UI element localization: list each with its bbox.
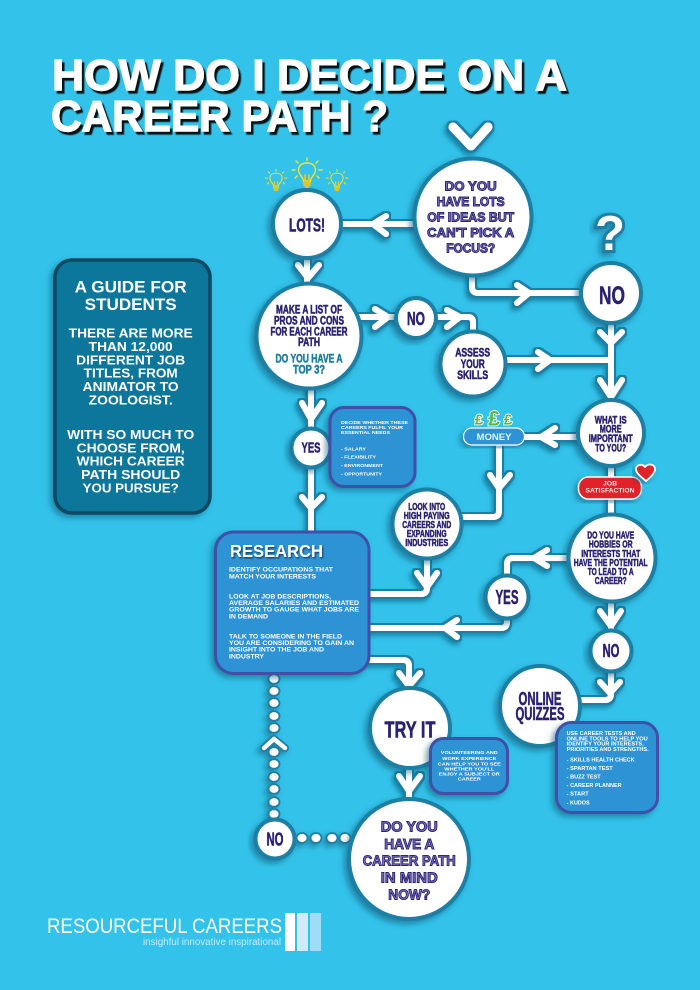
panel: essential needs: - FLEXIBILITY [341,455,377,461]
node: assess skills: SKILLS [457,368,488,382]
node: no (bottom) [256,820,294,858]
node: assess skills: ASSESS [455,346,490,360]
panel: guide for students: A GUIDE FOR [75,279,187,297]
node: ideas question: FOCUS? [446,240,495,255]
node: career path in mind: HAVE A [384,837,435,853]
node: pros and cons list: FOR EACH CAREER [270,326,348,338]
icon: pound signs: £ [504,412,513,428]
node: hobbies question: DO YOU HAVE [587,529,634,541]
node: pros and cons list: MAKE A LIST OF [276,304,342,316]
panel: guide for students: TITLES, FROM [84,366,178,381]
node: pros and cons list: TOP 3? [293,364,325,376]
arrow: yes to research [302,466,322,532]
arrow: no to assess [435,310,473,334]
node: career path in mind: IN MIND [381,871,438,887]
node: pros and cons list [256,284,362,388]
node: pros and cons list: PATH [298,337,320,349]
arrow: no to what is more important [600,322,622,402]
node: yes (hobbies) [486,576,528,618]
label: job satisfaction [578,465,655,499]
node: ideas question: CAN'T PICK A [427,225,514,240]
dotted return path [264,674,350,843]
logo: resourceful careers: insighful innovative inspirational [143,936,281,948]
panel: guide for students: DIFFERENT JOB [76,352,185,367]
panel: volunteering [430,738,508,794]
node: what is more important: WHAT IS [595,414,627,426]
node: hobbies question: TO LEAD TO A [588,566,634,578]
panel: research: AVERAGE SALARIES AND ESTIMATED [229,600,359,607]
panel: guide for students: ANIMATOR TO [83,379,179,394]
panel: career tests: ONLINE TOOLS TO HELP YOU [567,736,648,742]
panel: guide for students [55,260,210,513]
icon: heart [636,465,655,481]
node: career path in mind: NOW? [388,887,430,903]
panel: research: GROWTH TO GAUGE WHAT JOBS ARE [229,607,360,614]
logo: resourceful careers: RESOURCEFUL CAREERS [47,914,282,938]
arrow: hobbies to no [600,600,621,632]
node: hobbies question: HAVE THE POTENTIAL [574,557,648,569]
arrow: lots to list [298,256,319,286]
node: no (top right) [581,263,641,323]
logo: resourceful careers [47,913,321,951]
node: hobbies question: CAREER? [595,575,627,587]
node: try it: TRY IT [384,717,436,743]
node: lots: LOTS! [289,216,325,236]
panel: career tests: - KUDOS [567,800,590,806]
node: what is more important: TO YOU? [595,442,626,454]
title [51,51,567,141]
node: career path in mind: CAREER PATH [363,854,456,870]
panel: essential needs: - OPPORTUNITY [341,471,383,477]
panel: research [216,532,369,674]
panel: essential needs: - ENVIRONMENT [341,463,383,469]
node: ideas question [414,158,532,276]
panel: research: LOOK AT JOB DESCRIPTIONS, [229,593,331,600]
node: yes (top 3) [292,428,330,468]
icon: pound signs: £ [475,412,484,428]
panel: career tests [556,722,658,812]
panel: volunteering: CAREER [458,777,481,783]
panel: guide for students: CHOOSE FROM, [77,440,185,455]
node: career path in mind: DO YOU [381,820,438,836]
node: no (hobbies) [590,630,632,672]
node: pros and cons list: DO YOU HAVE A [276,353,342,365]
arrow: list to no [358,309,398,327]
flow connectors [298,127,622,800]
node: look into high paying careers: CAREERS AND [402,519,451,531]
node: look into high paying careers: HIGH PAYING [404,510,450,522]
node: ideas question: DO YOU [445,179,497,194]
arrow: yes to research [368,615,507,637]
panel: research: IN DEMAND [229,613,268,620]
node: career path in mind [349,799,469,919]
node: look into high paying careers: EXPANDING [407,528,447,540]
arrow: ideas to no [472,272,582,303]
panel: volunteering: WHETHER YOU'LL [444,767,494,773]
node: no (list) [396,298,436,338]
node: ideas question: OF IDEAS BUT [427,210,514,225]
title: HOW DO I DECIDE ON A [52,51,567,100]
panel: guide for students: ZOOLOGIST. [89,392,173,407]
node: hobbies question: HOBBIES OR [589,539,633,551]
panel: essential needs [330,408,415,486]
arrow: list to yes [302,386,322,430]
panel: career tests: - CAREER PLANNER [567,783,622,789]
panel: volunteering: CAN HELP YOU TO SEE [438,761,502,767]
arrow: important to hobbies [608,464,614,516]
arrow: ideas to lots [340,216,415,234]
arrow: try it to career path [399,766,420,800]
label: job satisfaction: JOB [603,481,617,488]
node: yes (top 3): YES [302,440,320,457]
arrow: important to money [523,428,580,445]
node: pros and cons list: PROS AND CONS [274,315,344,327]
node: online quizzes: ONLINE [518,689,562,709]
arrow: high paying to research [368,556,437,594]
panel: essential needs: ESSENTIAL NEEDS [341,430,391,436]
panel: research: TALK TO SOMEONE IN THE FIELD [229,633,342,640]
panel: guide for students: WITH SO MUCH TO [67,427,194,442]
panel: career tests: IDENTIFY YOUR INTERESTS, [567,742,644,748]
panel: essential needs: - SALARY [341,446,367,452]
arrow: start chevron [453,127,488,146]
node: assess skills: YOUR [461,357,485,371]
node: no (hobbies): NO [602,641,620,661]
label: money: MONEY [476,432,512,442]
panel: guide for students: WHICH CAREER [77,454,185,469]
node: no (list): NO [407,309,425,329]
node: no (bottom): NO [266,830,284,850]
panel: research: RESEARCH [230,541,323,561]
icon: pound signs [475,408,513,430]
node: ideas question: HAVE LOTS [437,194,505,209]
arrow: hobbies to yes [507,550,570,578]
node: look into high paying careers: INDUSTRIES [405,537,448,549]
node: what is more important: IMPORTANT [589,433,633,445]
panel: career tests: - SPARTAN TEST [567,766,613,772]
panel: essential needs: DECIDE WHETHER THESE [341,420,409,426]
node: yes (hobbies): YES [496,587,518,609]
icons: light bulbs [265,158,348,190]
label: job satisfaction: SATISFACTION [586,488,635,494]
icon: pound signs: £ [488,408,500,430]
arrow: research to try it [368,660,420,690]
arrow: no to quizzes [578,670,620,700]
panel: career tests: - SKILLS HEALTH CHECK [567,757,635,763]
panel: research: IDENTIFY OCCUPATIONS THAT [229,567,334,574]
arrow: assess to main line [503,352,609,369]
panel: career tests: - BUZZ TEST [567,775,601,781]
panel: career tests: USE CAREER TESTS AND [567,731,636,737]
panel: essential needs: CAREERS FULFIL YOUR [341,425,404,431]
panel: research: MATCH YOUR INTERESTS [229,573,317,580]
node: look into high paying careers: LOOK INTO [408,501,445,513]
panel: guide for students: THAN 12,000 [89,339,173,354]
panel: research: INDUSTRY [229,653,265,660]
node: hobbies question: INTERESTS THAT [581,548,641,560]
icon: question mark: ? [595,207,625,261]
panel: guide for students: YOU PURSUE? [83,480,179,495]
panel: guide for students: PATH SHOULD [81,467,180,482]
panel: volunteering: ENJOY A SUBJECT OR [439,772,500,778]
panel: career tests: PRIORITIES AND STRENGTHS. [567,747,649,753]
panel: research: YOU ARE CONSIDERING TO GAIN AN [229,640,354,647]
title: CAREER PATH ? [51,92,388,141]
node: look into high paying careers [392,490,462,558]
node: no (top right): NO [599,282,625,310]
panel: guide for students: THERE ARE MORE [69,325,193,340]
node: assess skills [440,332,506,396]
arrow: money to high paying [458,445,510,517]
panel: volunteering: VOLUNTEERING AND [441,750,498,756]
node: online quizzes: QUIZZES [516,704,564,724]
node: try it [370,688,450,768]
node: what is more important: MORE [600,424,622,436]
label: money [464,408,524,445]
node: lots [273,190,341,258]
panel: guide for students: STUDENTS [85,296,177,314]
node: online quizzes [500,666,580,746]
node: what is more important [578,400,644,466]
node: hobbies question [568,514,656,602]
panel: research: INSIGHT INTO THE JOB AND [229,647,324,654]
panel: volunteering: WORK EXPERIENCE [442,756,497,762]
panel: career tests: - START [567,792,589,798]
